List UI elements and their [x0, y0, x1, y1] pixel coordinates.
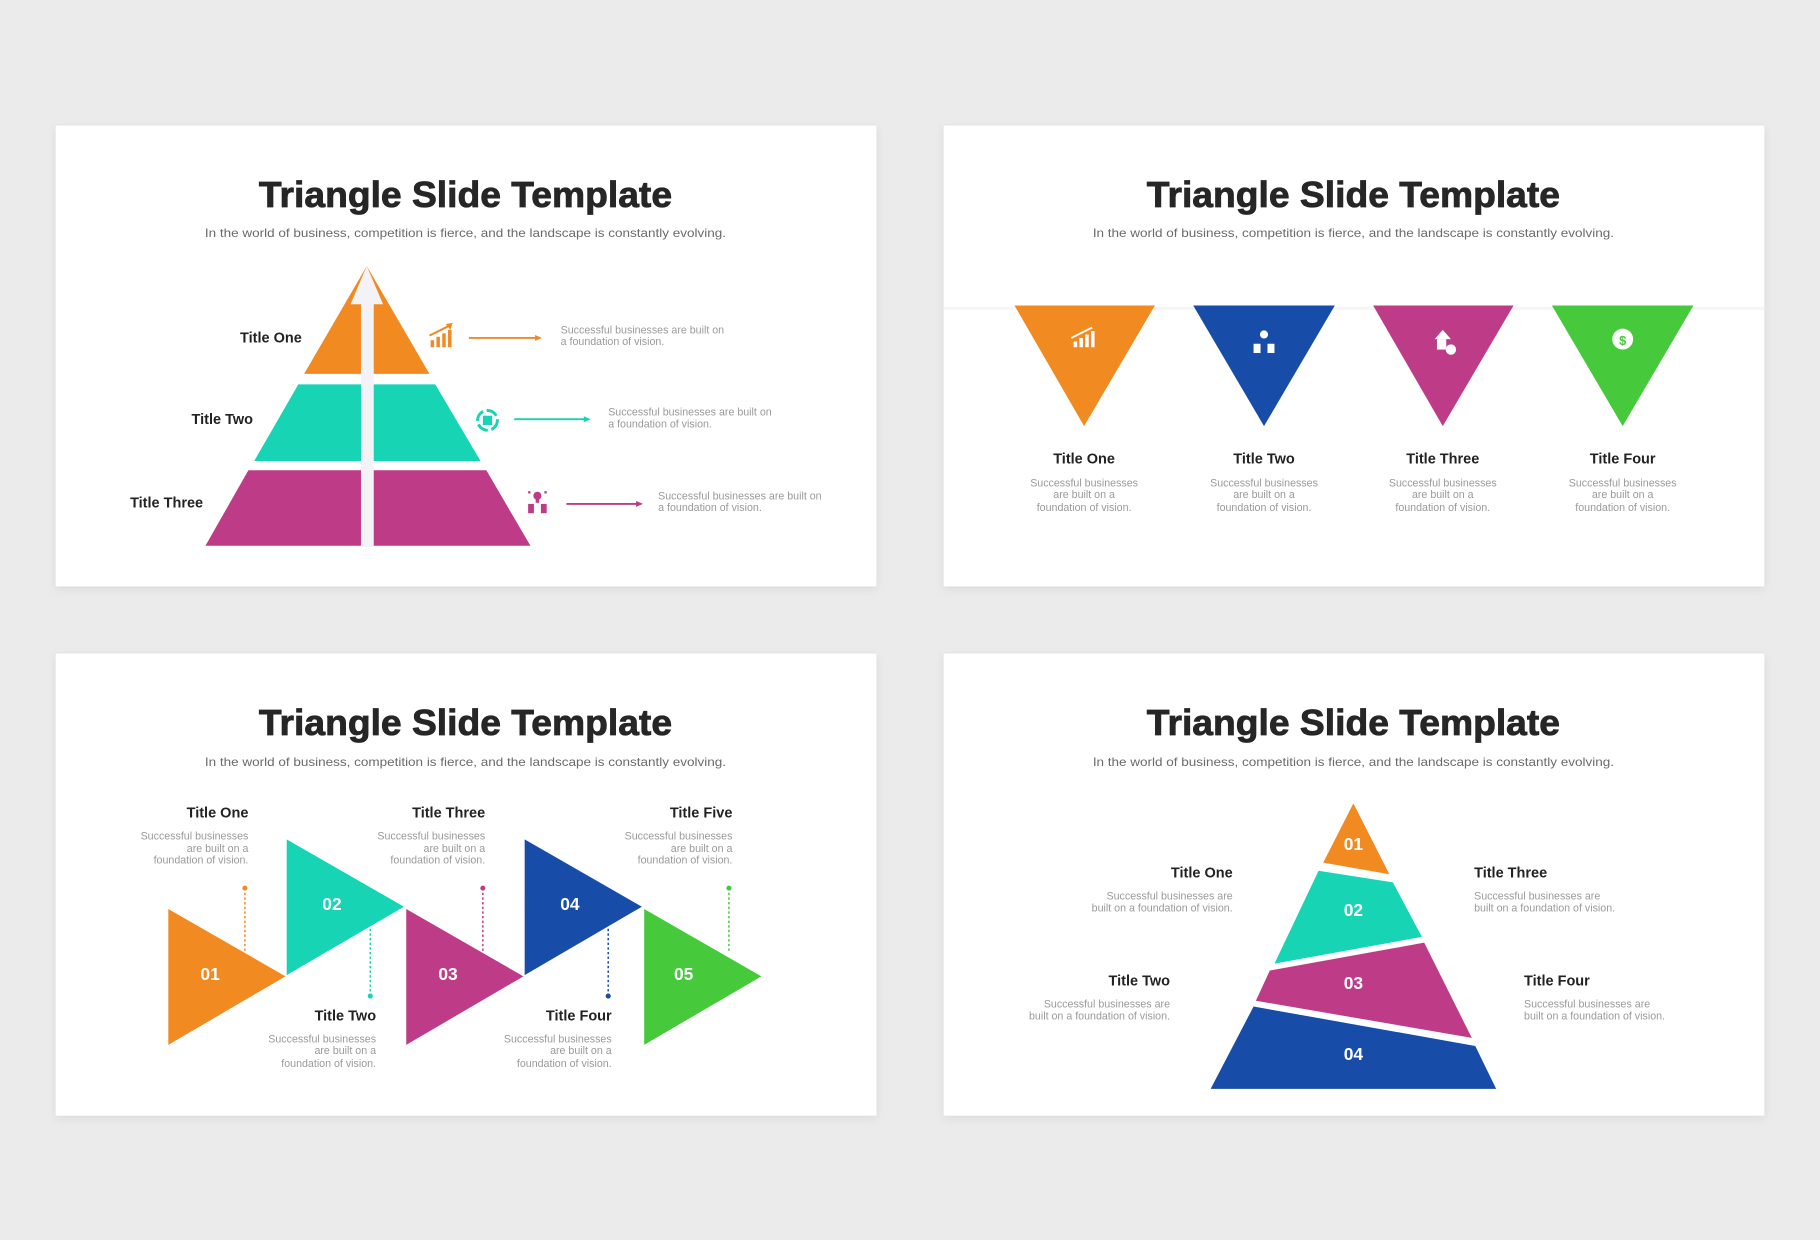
descriptions	[561, 324, 822, 514]
triangles: 03	[438, 964, 458, 984]
labels: Title One	[1171, 866, 1233, 882]
labels: foundation of vision.	[154, 855, 248, 867]
descriptions: a foundation of vision.	[658, 502, 762, 514]
icon: growth chart	[429, 323, 453, 347]
icon: idea team	[528, 491, 547, 513]
labels: Successful businesses are	[1044, 999, 1170, 1011]
title: Triangle Slide Template	[259, 702, 672, 743]
labels: Title One	[240, 331, 302, 347]
labels: Title Two	[1108, 974, 1170, 990]
descriptions: Successful businesses are built on	[561, 324, 724, 336]
items text: Successful businesses	[1569, 478, 1677, 490]
descriptions: a foundation of vision.	[608, 418, 712, 430]
pyramid: 02	[1344, 900, 1363, 920]
panel: tilted pyramid	[944, 654, 1764, 1116]
labels: Title Three	[412, 805, 485, 821]
arrows	[469, 335, 643, 507]
items text: Title Three	[1406, 451, 1479, 467]
labels: foundation of vision.	[390, 855, 485, 867]
labels: Successful businesses	[268, 1034, 376, 1046]
panel: pyramid with arrow	[56, 126, 876, 586]
labels	[1029, 866, 1665, 1022]
items text: Title Two	[1233, 451, 1295, 467]
labels: foundation of vision.	[638, 855, 732, 867]
labels: Title One	[187, 805, 248, 821]
labels: Successful businesses are	[1107, 891, 1233, 903]
items text: Title One	[1053, 451, 1115, 467]
labels: Title Five	[670, 805, 732, 821]
labels: are built on a	[424, 843, 485, 855]
triangles: 02	[322, 894, 342, 914]
descriptions: a foundation of vision.	[561, 336, 664, 348]
subtitle: In the world of business, competition is fierce, and the landscape is constantly evolving.	[205, 226, 726, 240]
labels: built on a foundation of vision.	[1524, 1010, 1665, 1022]
panel: inverted triangles	[944, 126, 1764, 586]
icons	[1071, 328, 1633, 355]
labels: foundation of vision.	[517, 1058, 612, 1070]
labels: Title Two	[192, 412, 253, 428]
labels: Title Three	[130, 495, 203, 511]
items text: foundation of vision.	[1395, 502, 1490, 514]
items text: foundation of vision.	[1575, 502, 1670, 514]
labels: Successful businesses are	[1524, 999, 1650, 1011]
pyramid: 01	[1344, 834, 1363, 854]
labels: Title Three	[1474, 866, 1547, 882]
labels: built on a foundation of vision.	[1474, 902, 1615, 914]
items text: Successful businesses	[1030, 478, 1138, 490]
items text: are built on a	[1592, 489, 1654, 501]
triangles	[168, 839, 761, 1045]
labels: Successful businesses	[504, 1034, 612, 1046]
items text: are built on a	[1412, 489, 1474, 501]
labels: are built on a	[314, 1045, 376, 1057]
triangles: 04	[560, 894, 580, 914]
labels: Title Four	[546, 1008, 612, 1024]
pyramid	[1211, 803, 1496, 1089]
labels: Title Two	[315, 1008, 376, 1024]
title: Triangle Slide Template	[259, 174, 672, 215]
items text: Title Four	[1590, 451, 1656, 467]
items text: are built on a	[1053, 489, 1115, 501]
labels: built on a foundation of vision.	[1092, 902, 1233, 914]
labels: Successful businesses	[377, 830, 485, 842]
triangles	[1014, 305, 1693, 426]
title: Triangle Slide Template	[1147, 174, 1560, 215]
pyramid	[205, 266, 530, 547]
labels: Successful businesses	[141, 830, 248, 842]
labels: foundation of vision.	[281, 1058, 376, 1070]
pyramid: 04	[1344, 1044, 1363, 1064]
triangles: 01	[200, 964, 220, 984]
labels: built on a foundation of vision.	[1029, 1010, 1170, 1022]
subtitle: In the world of business, competition is fierce, and the landscape is constantly evolving.	[1093, 226, 1614, 240]
items text: foundation of vision.	[1217, 502, 1311, 514]
descriptions: Successful businesses are built on	[608, 407, 772, 419]
panel: zigzag triangles	[56, 654, 876, 1116]
items text: foundation of vision.	[1037, 502, 1132, 514]
items text: Successful businesses	[1389, 478, 1497, 490]
title: Triangle Slide Template	[1147, 702, 1560, 743]
icons: $	[1619, 333, 1626, 348]
descriptions: Successful businesses are built on	[658, 490, 822, 502]
triangles: 05	[674, 964, 694, 984]
labels: are built on a	[550, 1045, 612, 1057]
subtitle: In the world of business, competition is fierce, and the landscape is constantly evolving.	[1093, 755, 1614, 769]
dotted connectors	[245, 888, 729, 996]
items text	[1030, 451, 1677, 514]
labels: are built on a	[187, 843, 248, 855]
icon: cycle	[478, 410, 497, 430]
labels: Title Four	[1524, 974, 1590, 990]
labels	[130, 331, 302, 511]
items text: Successful businesses	[1210, 478, 1318, 490]
pyramid: 03	[1344, 973, 1363, 993]
labels	[141, 805, 732, 1070]
labels: are built on a	[671, 843, 732, 855]
labels: Successful businesses are	[1474, 891, 1600, 903]
subtitle: In the world of business, competition is fierce, and the landscape is constantly evolving.	[205, 755, 726, 769]
items text: are built on a	[1233, 489, 1295, 501]
labels: Successful businesses	[625, 830, 732, 842]
